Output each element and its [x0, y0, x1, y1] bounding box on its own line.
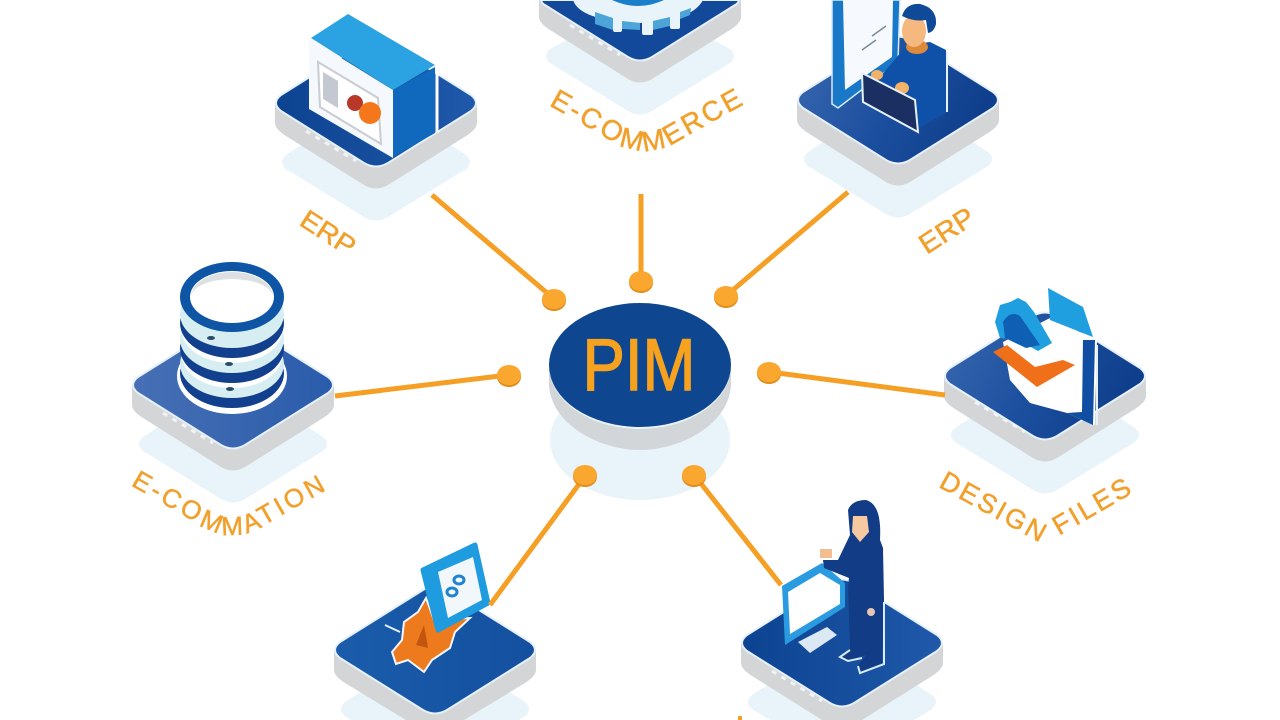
panel: ERP left — [275, 40, 477, 220]
path for Design Files label — [935, 485, 1138, 542]
icon: gear — [573, 0, 703, 35]
icon: design tools — [993, 288, 1097, 425]
icon: database cylinder — [177, 262, 287, 414]
icon: orange parts and tablet — [385, 545, 488, 672]
connector lines — [335, 192, 945, 605]
icon: person with laptop and tablet — [832, 0, 947, 132]
panel: design files right — [944, 312, 1146, 494]
icon: person at monitor — [782, 500, 884, 673]
connector end dots — [497, 271, 781, 487]
panel: bottom right — [741, 580, 943, 720]
central PIM hub — [549, 303, 731, 500]
icon: ERP server box — [309, 14, 437, 158]
PIM label: PIM — [582, 325, 696, 406]
panel: ERP right — [797, 36, 999, 218]
panel: bottom left — [334, 586, 536, 720]
label: E-COMMERCE: E-COMMERCE — [550, 88, 744, 152]
panel: database left — [132, 322, 334, 502]
clipped label fragment — [738, 716, 742, 720]
label: DESIGN FILES: DESIGN FILES — [939, 471, 1130, 542]
path for E-commerce label — [543, 100, 752, 150]
label: ERP right: ERP — [913, 201, 980, 260]
panel: E-commerce top — [539, 0, 741, 114]
path for E-commation label — [125, 482, 335, 535]
label: ERP left: ERP — [295, 204, 361, 262]
label: E-COMMATION: E-COMMATION — [132, 470, 325, 536]
